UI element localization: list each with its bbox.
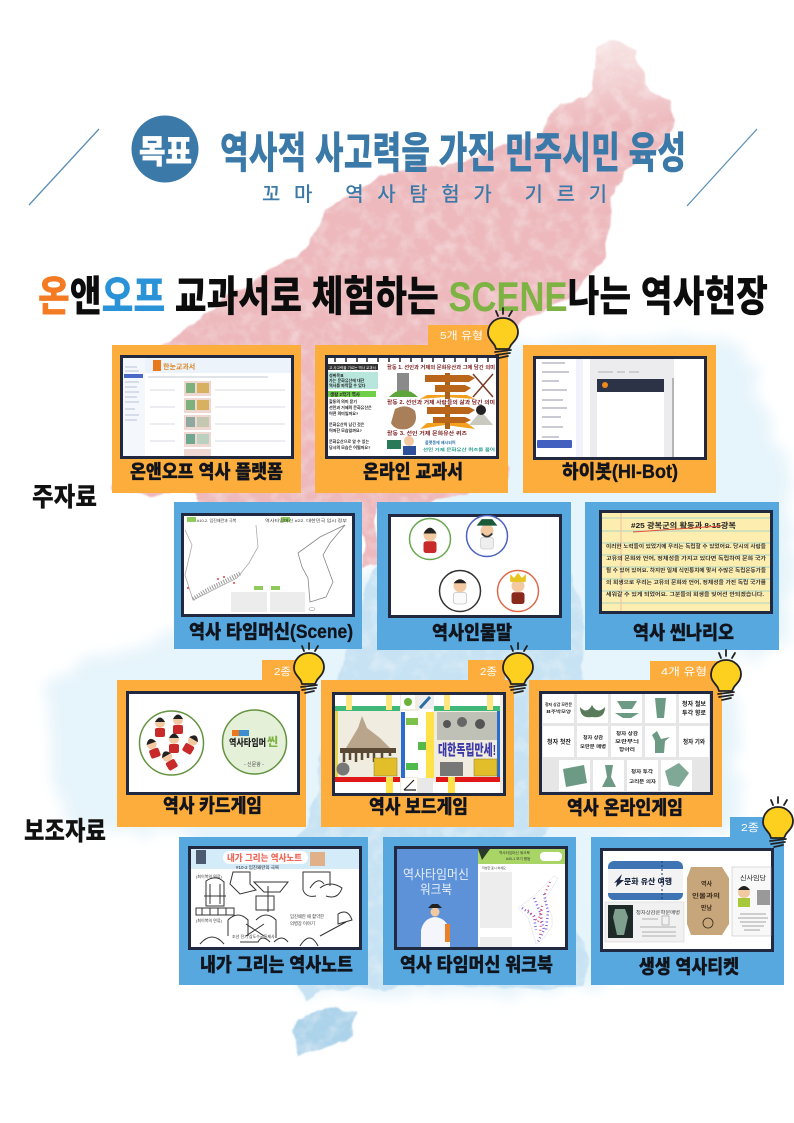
card: board game <box>321 660 514 827</box>
thumbnail: workbook: 작성한 표시 하세요 <box>482 865 506 870</box>
card: scenario: 역사 씬나리오 <box>633 622 734 644</box>
thumbnail: textbook: 활동 2. 선인과 거제 사람들의 삶과 담긴 의미 <box>387 399 495 406</box>
thumbnail: textbook: 어떤 의미일까요? <box>329 410 359 416</box>
thumbnail: celadon grid: 청자 상감 <box>583 734 603 741</box>
thumbnail: card game: - 신문왕 - <box>244 761 264 768</box>
card: drawing note <box>179 837 368 985</box>
tab: two kinds: 2종 <box>274 666 291 678</box>
thumbnail: celadon grid: 청자 기와 <box>683 738 705 746</box>
card: drawing note: 내가 그리는 역사노트 <box>200 954 353 976</box>
thumbnail: card game: 씬 <box>267 734 278 749</box>
thumbnail: textbook: 생활 2학기 역사 <box>330 391 361 398</box>
thumbnail: textbook: 고 사고력을 기르는 역사 교과서 <box>329 365 376 370</box>
thumbnail: celadon grid: 청자 상감 <box>616 730 638 737</box>
card: historical figures <box>377 502 571 650</box>
thumbnail: celadon grid: 모란무늬 <box>615 738 639 745</box>
card: Hi-Bot <box>523 345 716 493</box>
goal badge: 목표 <box>139 133 192 170</box>
thumbnail: lined paper: 의 희생으로 우리는 고유의 문화와 언어, 정체성을 가진 독립 국가를 <box>606 579 766 586</box>
thumbnail: textbook: 문화유산이 남긴 것은 <box>329 421 365 427</box>
card: scenario <box>585 502 779 650</box>
card: tickets: 생생 역사티켓 <box>639 956 739 978</box>
card: time machine scene: 역사 타임머신(Scene) <box>189 621 353 643</box>
thumbnail: lined paper: #25 광복군의 활동과 8·15광복 <box>631 520 736 530</box>
thumbnail: tickets: 신사임당 <box>740 873 766 882</box>
background: blue watercolor <box>292 504 590 1054</box>
tab: two kinds: 2종 <box>480 666 497 678</box>
goal badge <box>132 116 198 182</box>
card: online game <box>529 661 722 827</box>
thumbnail: tickets <box>602 850 772 950</box>
thumbnail: textbook: 선인과 거제의 문화유산은 <box>329 404 372 410</box>
card: workbook: 역사 타임머신 워크북 <box>400 954 553 976</box>
thumbnail: celadon grid: 청자 투각 <box>631 768 653 775</box>
card: Hi-Bot: 하이봇(HI-Bot) <box>562 461 678 483</box>
decorative diagonal line left <box>29 129 757 206</box>
card: card game: 역사 카드게임 <box>163 795 262 817</box>
background: pink watercolor <box>112 43 674 566</box>
thumbnail: tickets: 만남 <box>701 904 713 912</box>
thumbnail: maps: #10-2. 임진왜란과 극복 <box>197 517 237 523</box>
thumbnail: textbook: 성취목표 <box>329 372 344 378</box>
thumbnail: textbook: 활동 1. 선인과 거제의 문화유산과 그에 담긴 의미 <box>387 364 495 371</box>
thumbnail: board <box>334 694 504 794</box>
thumbnail: tickets: 문화 유산 여행 <box>624 876 672 886</box>
thumbnail: workbook: 역사타임머신 <box>403 867 469 882</box>
icon: light bulb online game <box>711 650 741 700</box>
thumbnail: workbook: 워크북 <box>420 882 452 897</box>
thumbnail: tickets: 청자상감운학문매병 <box>636 909 680 916</box>
thumbnail: tickets: 역사 <box>701 880 713 888</box>
thumbnail: card game: 역사타임머 <box>229 737 266 749</box>
thumbnail: note: #10-2 임진왜란의 극복 <box>236 864 279 871</box>
thumbnail: tickets: 인물과의 <box>692 892 720 900</box>
card: workbook <box>383 837 576 985</box>
thumbnail: lined paper: 될 수 있어 있어요. 하지만 일제 식민통치에 맞서 수많은 독립운동가들 <box>606 567 766 574</box>
thumbnail: note: (최이복의 면류) <box>196 873 223 879</box>
thumbnail: textbook: 가는 문화유산에 대한 <box>329 377 365 383</box>
thumbnail: lined paper: 이러한 노력들이 있었기에 우리는 독립할 수 있었어요. 당시의 사람들 <box>606 543 766 550</box>
thumbnail: celadon grid: 청자 철보 <box>682 700 706 708</box>
thumbnail: celadon grid: 청자 상감 모란문 <box>545 701 572 707</box>
tab: four types: 4개 유형 <box>661 666 707 678</box>
card: online textbook <box>315 325 508 493</box>
thumbnail: platform screen <box>122 356 292 458</box>
thumbnail: celadon grid: 청자 첫잔 <box>547 738 571 746</box>
thumbnail: lined paper <box>600 512 772 612</box>
thumbnail: note: 내가 그리는 역사노트 <box>227 852 302 863</box>
background: pale blue wash <box>45 340 792 995</box>
thumbnail: workbook <box>396 848 566 948</box>
thumbnail: note <box>190 848 360 948</box>
thumbnail: celadon grid: 항아리 <box>619 746 635 753</box>
icon: light bulb board game <box>503 643 533 693</box>
label: supplementary materials: 보조자료 <box>24 816 106 846</box>
thumbnail: chatbot <box>534 358 706 458</box>
label: main materials: 주자료 <box>32 482 97 512</box>
thumbnail: celadon grid: 표주박모양 <box>546 708 571 714</box>
icon: light bulb card game <box>294 643 324 693</box>
card: online textbook: 온라인 교과서 <box>363 461 463 483</box>
thumbnail: textbook: 선인 거제 문화유산 퀴즈를 풀어 <box>423 446 495 452</box>
card: time machine scene <box>174 502 362 649</box>
thumbnail: textbook: 활동의 의미 묻기 <box>329 398 357 404</box>
thumbnail: celadon grid <box>540 692 712 794</box>
thumbnail: lined paper: 세워갈 수 있게 되었어요. 그분들의 희생을 잊어선 안되겠습니다. <box>606 591 765 598</box>
thumbnail: textbook: 역사를 파악할 수 있다 <box>329 382 366 388</box>
thumbnail: board: 대한독립만세! <box>438 741 496 759</box>
subtitle: 꼬마 역사탐험가 기르기 <box>262 183 607 206</box>
thumbnail: textbook <box>326 356 498 458</box>
thumbnail: maps: 역사타임머신 #22. 대한민국 임시 정부 <box>265 518 348 523</box>
thumbnail: note: 의병장 이야기 <box>290 920 315 927</box>
thumbnail: figures <box>390 516 560 616</box>
thumbnail: textbook: 문화유산으로 알 수 있는 <box>329 438 369 444</box>
thumbnail: note: 임진왜란 때 활약한 <box>290 913 324 920</box>
card: platform: 온앤오프 역사 플랫폼 <box>130 461 283 483</box>
icon: light bulb <box>488 308 518 358</box>
thumbnail: celadon grid: 고리문 의자 <box>629 778 657 785</box>
thumbnail: workbook: #40-1 보기 평등 <box>506 856 531 861</box>
thumbnail: celadon grid: 투각 향로 <box>682 709 706 717</box>
tab: types: 5개 유형 <box>440 330 483 342</box>
thumbnail: celadon grid: 모란문 매병 <box>580 743 606 750</box>
thumbnail: note: (최이복의 면류) <box>196 917 223 923</box>
card: platform <box>112 345 301 493</box>
card: online game: 역사 온라인게임 <box>567 797 683 819</box>
card: board game: 역사 보드게임 <box>369 796 468 818</box>
thumbnail: card game <box>128 692 298 794</box>
thumbnail: lined paper: 고유의 문화와 언어, 정체성을 가지고 있다면 독립하여 문화 국가 <box>606 555 766 562</box>
thumbnail: maps <box>182 514 354 616</box>
thumbnail: textbook: 당시의 모습은 어떨까요? <box>329 444 371 450</box>
thumbnail: textbook: 플랫폼에 제시되어 <box>425 439 456 445</box>
thumbnail: note: 조선 전기 삼도수군통제사 <box>232 933 275 939</box>
tab: two kinds: 2종 <box>741 822 759 834</box>
card: card game <box>117 660 306 827</box>
card: tickets <box>591 817 784 985</box>
thumbnail: platform screen: 한눈교과서 <box>163 362 195 371</box>
thumbnail: textbook: 활동 3. 선인 거제 문화유산 퀴즈 <box>387 430 467 437</box>
thumbnail: textbook: 어떠한 모습일까요? <box>329 427 363 433</box>
thumbnail: workbook: 역사타임머신 워크북 <box>499 850 530 855</box>
headline: 온앤오프 교과서로 체험하는 SCENE나는 역사현장 <box>38 273 768 320</box>
card: historical figures: 역사인물말 <box>432 622 512 644</box>
icon: light bulb tickets <box>763 797 793 847</box>
